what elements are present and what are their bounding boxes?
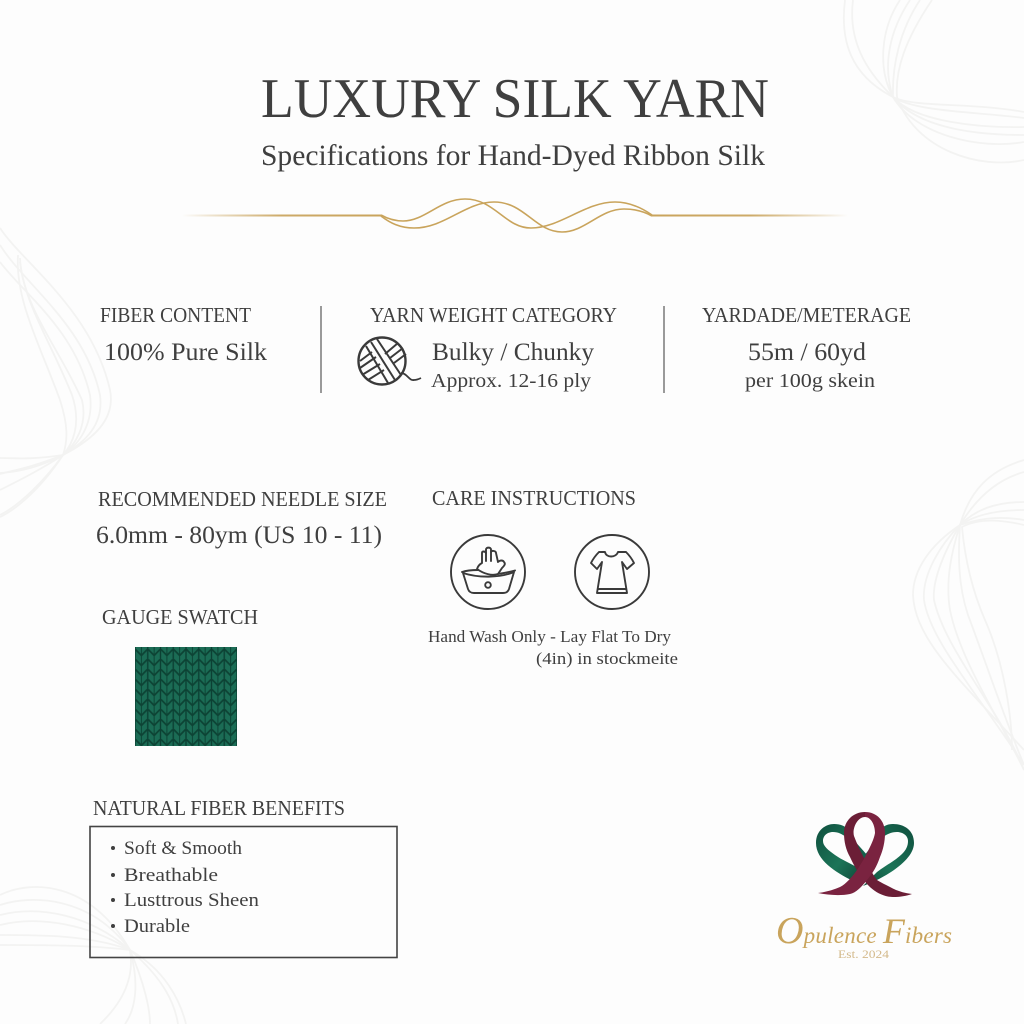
title: LUXURY SILK YARN (261, 68, 769, 130)
panel: yardage: per 100g skein (745, 371, 875, 392)
care caption: Hand Wash Only - Lay Flat To Dry (428, 627, 672, 646)
panel: needle size: 6.0mm - 80ym (US 10 - 11) (96, 522, 382, 549)
panel: natural fiber benefits (90, 796, 397, 958)
panel: fiber content (100, 303, 268, 366)
logo established date: Est. 2024 (838, 947, 889, 961)
panel: gauge swatch: GAUGE SWATCH (102, 605, 258, 629)
panel: needle size (96, 487, 387, 549)
panel: care instructions: CARE INSTRUCTIONS (432, 486, 636, 510)
panel: yarn weight category (358, 303, 617, 392)
panel: yardage: 55m / 60yd (748, 339, 867, 366)
divider (321, 306, 664, 393)
benefits list (111, 839, 259, 937)
panel: needle size: RECOMMENDED NEEDLE SIZE (98, 487, 387, 511)
icon: yarn ball (358, 338, 421, 384)
care caption: (4in) in stockmeite (536, 649, 678, 668)
panel: natural fiber benefits: NATURAL FIBER BENEFITS (93, 796, 345, 820)
benefits list: Lusttrous Sheen (124, 891, 259, 911)
panel: yardage (702, 303, 911, 392)
panel: gauge swatch (102, 605, 258, 746)
panel: yardage: YARDADE/METERAGE (702, 303, 911, 327)
logo wordmark: Opulence Fibers (776, 910, 952, 952)
care caption (428, 627, 678, 668)
panel: yarn weight category: Approx. 12-16 ply (431, 371, 591, 392)
icon: ribbon loops (816, 812, 914, 897)
panel: yarn weight category: YARN WEIGHT CATEGORY (370, 303, 617, 327)
panel: fiber content: 100% Pure Silk (104, 339, 268, 366)
panel: care instructions (428, 486, 678, 668)
benefits list: Durable (124, 917, 190, 937)
knitted swatch (135, 647, 237, 746)
benefits box (90, 826, 397, 958)
benefits list: Soft & Smooth (124, 839, 242, 859)
benefits list: Breathable (124, 866, 218, 886)
panel: yarn weight category: Bulky / Chunky (432, 339, 594, 366)
panel: fiber content: FIBER CONTENT (100, 303, 251, 327)
icon: hand wash (451, 535, 525, 609)
logo: Opulence Fibers (776, 812, 952, 961)
subtitle: Specifications for Hand-Dyed Ribbon Silk (261, 139, 765, 172)
gold ribbon divider (182, 199, 848, 232)
icon: lay flat to dry shirt (575, 535, 649, 609)
